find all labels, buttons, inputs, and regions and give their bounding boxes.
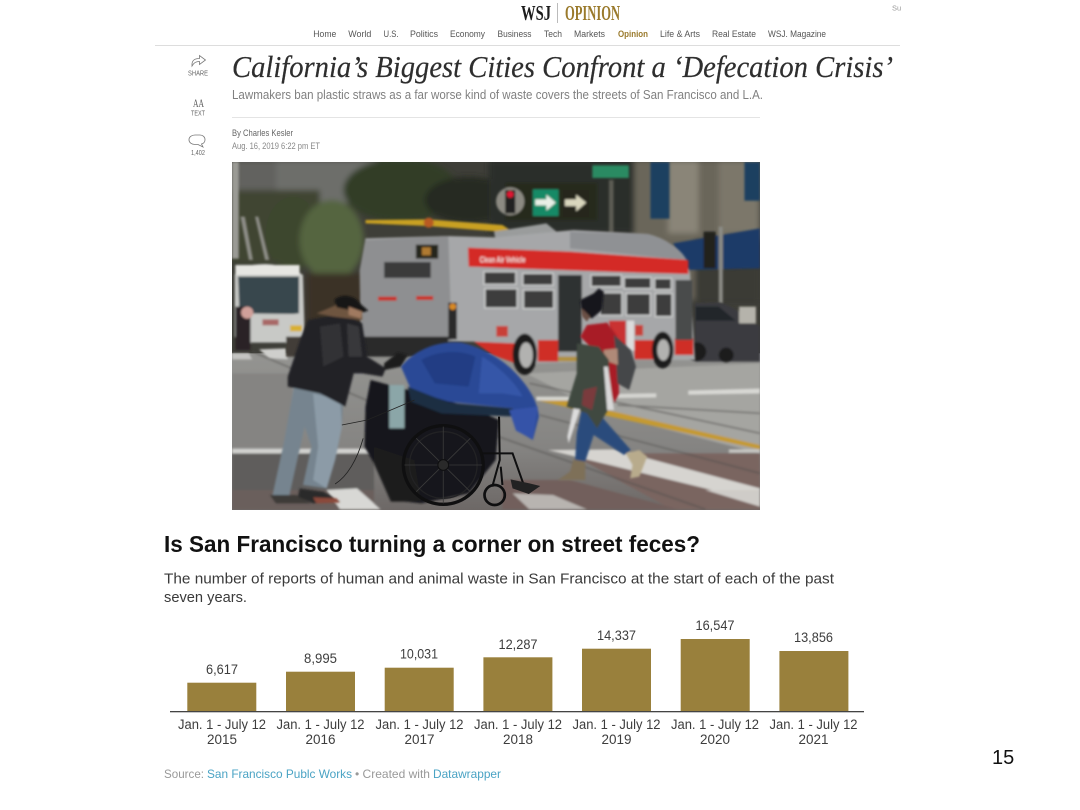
dark car on right xyxy=(687,303,760,362)
axis labels: 2017 xyxy=(404,732,434,747)
rope xyxy=(335,400,415,484)
road xyxy=(232,353,760,510)
axis labels: Jan. 1 - July 12 xyxy=(276,717,364,732)
bags xyxy=(365,380,499,503)
red top xyxy=(580,323,619,403)
glove xyxy=(384,353,408,370)
value labels: 14,337 xyxy=(597,628,636,643)
arm xyxy=(604,348,618,365)
value labels: 8,995 xyxy=(304,651,337,666)
chair frame and wheels xyxy=(403,417,524,505)
lower red skirt xyxy=(474,342,516,363)
source line: San Francisco Publc Works xyxy=(207,767,352,781)
side windows xyxy=(484,272,672,317)
hair xyxy=(580,288,604,318)
source line: Datawrapper xyxy=(433,767,501,781)
navigation bar: WSJ. Magazine xyxy=(768,29,826,39)
chart description: seven years. xyxy=(164,589,247,606)
opinion label: OPINION xyxy=(565,1,620,25)
navigation bar: Markets xyxy=(574,29,605,39)
chart description xyxy=(164,570,835,606)
jacket xyxy=(288,313,386,407)
navigation bar: Business xyxy=(498,29,532,39)
chart title: Is San Francisco turning a corner on street feces? xyxy=(164,531,700,557)
wheels xyxy=(513,334,537,375)
navigation bar: Real Estate xyxy=(712,29,756,39)
navigation bar: Life & Arts xyxy=(660,29,700,39)
second trolleybus on left xyxy=(235,264,310,357)
value labels: 6,617 xyxy=(206,662,238,677)
axis line xyxy=(170,711,864,712)
blue tarp xyxy=(401,342,539,440)
axis labels: Jan. 1 - July 12 xyxy=(770,717,858,732)
axis labels: 2018 xyxy=(503,732,533,747)
WSJ logo: WSJ xyxy=(521,1,551,25)
photo: man pushing a loaded wheelchair across a San Francisco street with a bus behind xyxy=(232,162,760,510)
source line xyxy=(164,767,501,781)
source line: Source: xyxy=(164,767,204,781)
axis labels: Jan. 1 - July 12 xyxy=(376,717,464,732)
navigation bar xyxy=(313,29,826,39)
trolleybus xyxy=(360,218,695,375)
hair and cap xyxy=(317,303,362,320)
deck: Lawmakers ban plastic straws as a far worse kind of waste covers the streets of San Francisco and L.A. xyxy=(232,88,763,102)
shoes xyxy=(270,495,311,503)
crosswalk stripes xyxy=(232,449,372,453)
subscribe clip: Su xyxy=(892,4,901,12)
date: Aug. 16, 2019 6:22 pm ET xyxy=(232,141,320,151)
axis labels: Jan. 1 - July 12 xyxy=(671,717,759,732)
red stripe xyxy=(468,248,688,274)
backpack xyxy=(614,335,636,390)
man in leather jacket xyxy=(270,296,408,503)
rear window and lights xyxy=(416,245,438,259)
navigation bar: Politics xyxy=(410,29,438,39)
boots xyxy=(558,459,585,480)
bus body xyxy=(360,230,695,363)
axis labels: Jan. 1 - July 12 xyxy=(178,717,266,732)
bars xyxy=(187,639,848,712)
carried coats xyxy=(567,343,609,428)
value labels xyxy=(206,618,833,677)
axis labels: 2021 xyxy=(798,732,828,747)
chart description: The number of reports of human and animal waste in San Francisco at the start of each of the past xyxy=(164,570,835,588)
wheelchair with belongings under blue tarp xyxy=(335,342,540,505)
icon: text size: AA xyxy=(193,96,204,110)
sidebar tools xyxy=(188,56,208,157)
masthead xyxy=(521,1,901,25)
traffic signals and signs xyxy=(232,162,760,303)
axis labels xyxy=(178,717,858,747)
value labels: 12,287 xyxy=(498,637,538,652)
axis labels: Jan. 1 - July 12 xyxy=(572,717,660,732)
byline: By Charles Kesler xyxy=(232,128,293,138)
umbrella xyxy=(567,408,580,443)
axis labels: 2019 xyxy=(602,732,632,747)
source line: • Created with xyxy=(355,767,430,781)
bar chart xyxy=(170,618,864,747)
trolley poles xyxy=(366,219,513,232)
axis labels: 2016 xyxy=(306,732,336,747)
yellow lane line xyxy=(538,401,760,449)
axis labels: Jan. 1 - July 12 xyxy=(474,717,562,732)
value labels: 16,547 xyxy=(696,618,734,633)
navigation bar: U.S. xyxy=(384,29,398,39)
headline: California’s Biggest Cities Confront a ‘Defecation Crisis’ xyxy=(232,49,893,84)
icon: share: SHARE xyxy=(188,68,208,78)
axis labels: 2020 xyxy=(700,732,730,747)
value labels: 13,856 xyxy=(794,630,833,645)
jeans xyxy=(575,408,631,462)
hanging coat xyxy=(374,447,421,502)
byline xyxy=(232,128,320,151)
woman in red shirt walking xyxy=(558,288,647,480)
page number: 15 xyxy=(992,747,1014,769)
background city xyxy=(232,158,760,340)
value labels: 10,031 xyxy=(400,646,438,662)
icon: text size: TEXT xyxy=(191,108,205,118)
footrest xyxy=(511,479,540,494)
jeans xyxy=(273,383,344,495)
navigation bar: Home xyxy=(313,29,336,39)
navigation bar: Opinion xyxy=(618,29,648,39)
navigation bar: World xyxy=(348,29,371,39)
navigation bar: Economy xyxy=(450,29,485,39)
tracks xyxy=(252,352,760,509)
icon: text size xyxy=(191,96,205,118)
navigation bar: Tech xyxy=(544,29,562,39)
trolleybus: Clean Air Vehicle xyxy=(480,255,526,265)
axis labels: 2015 xyxy=(207,732,237,747)
icon: comments: 1,402 xyxy=(191,148,205,157)
